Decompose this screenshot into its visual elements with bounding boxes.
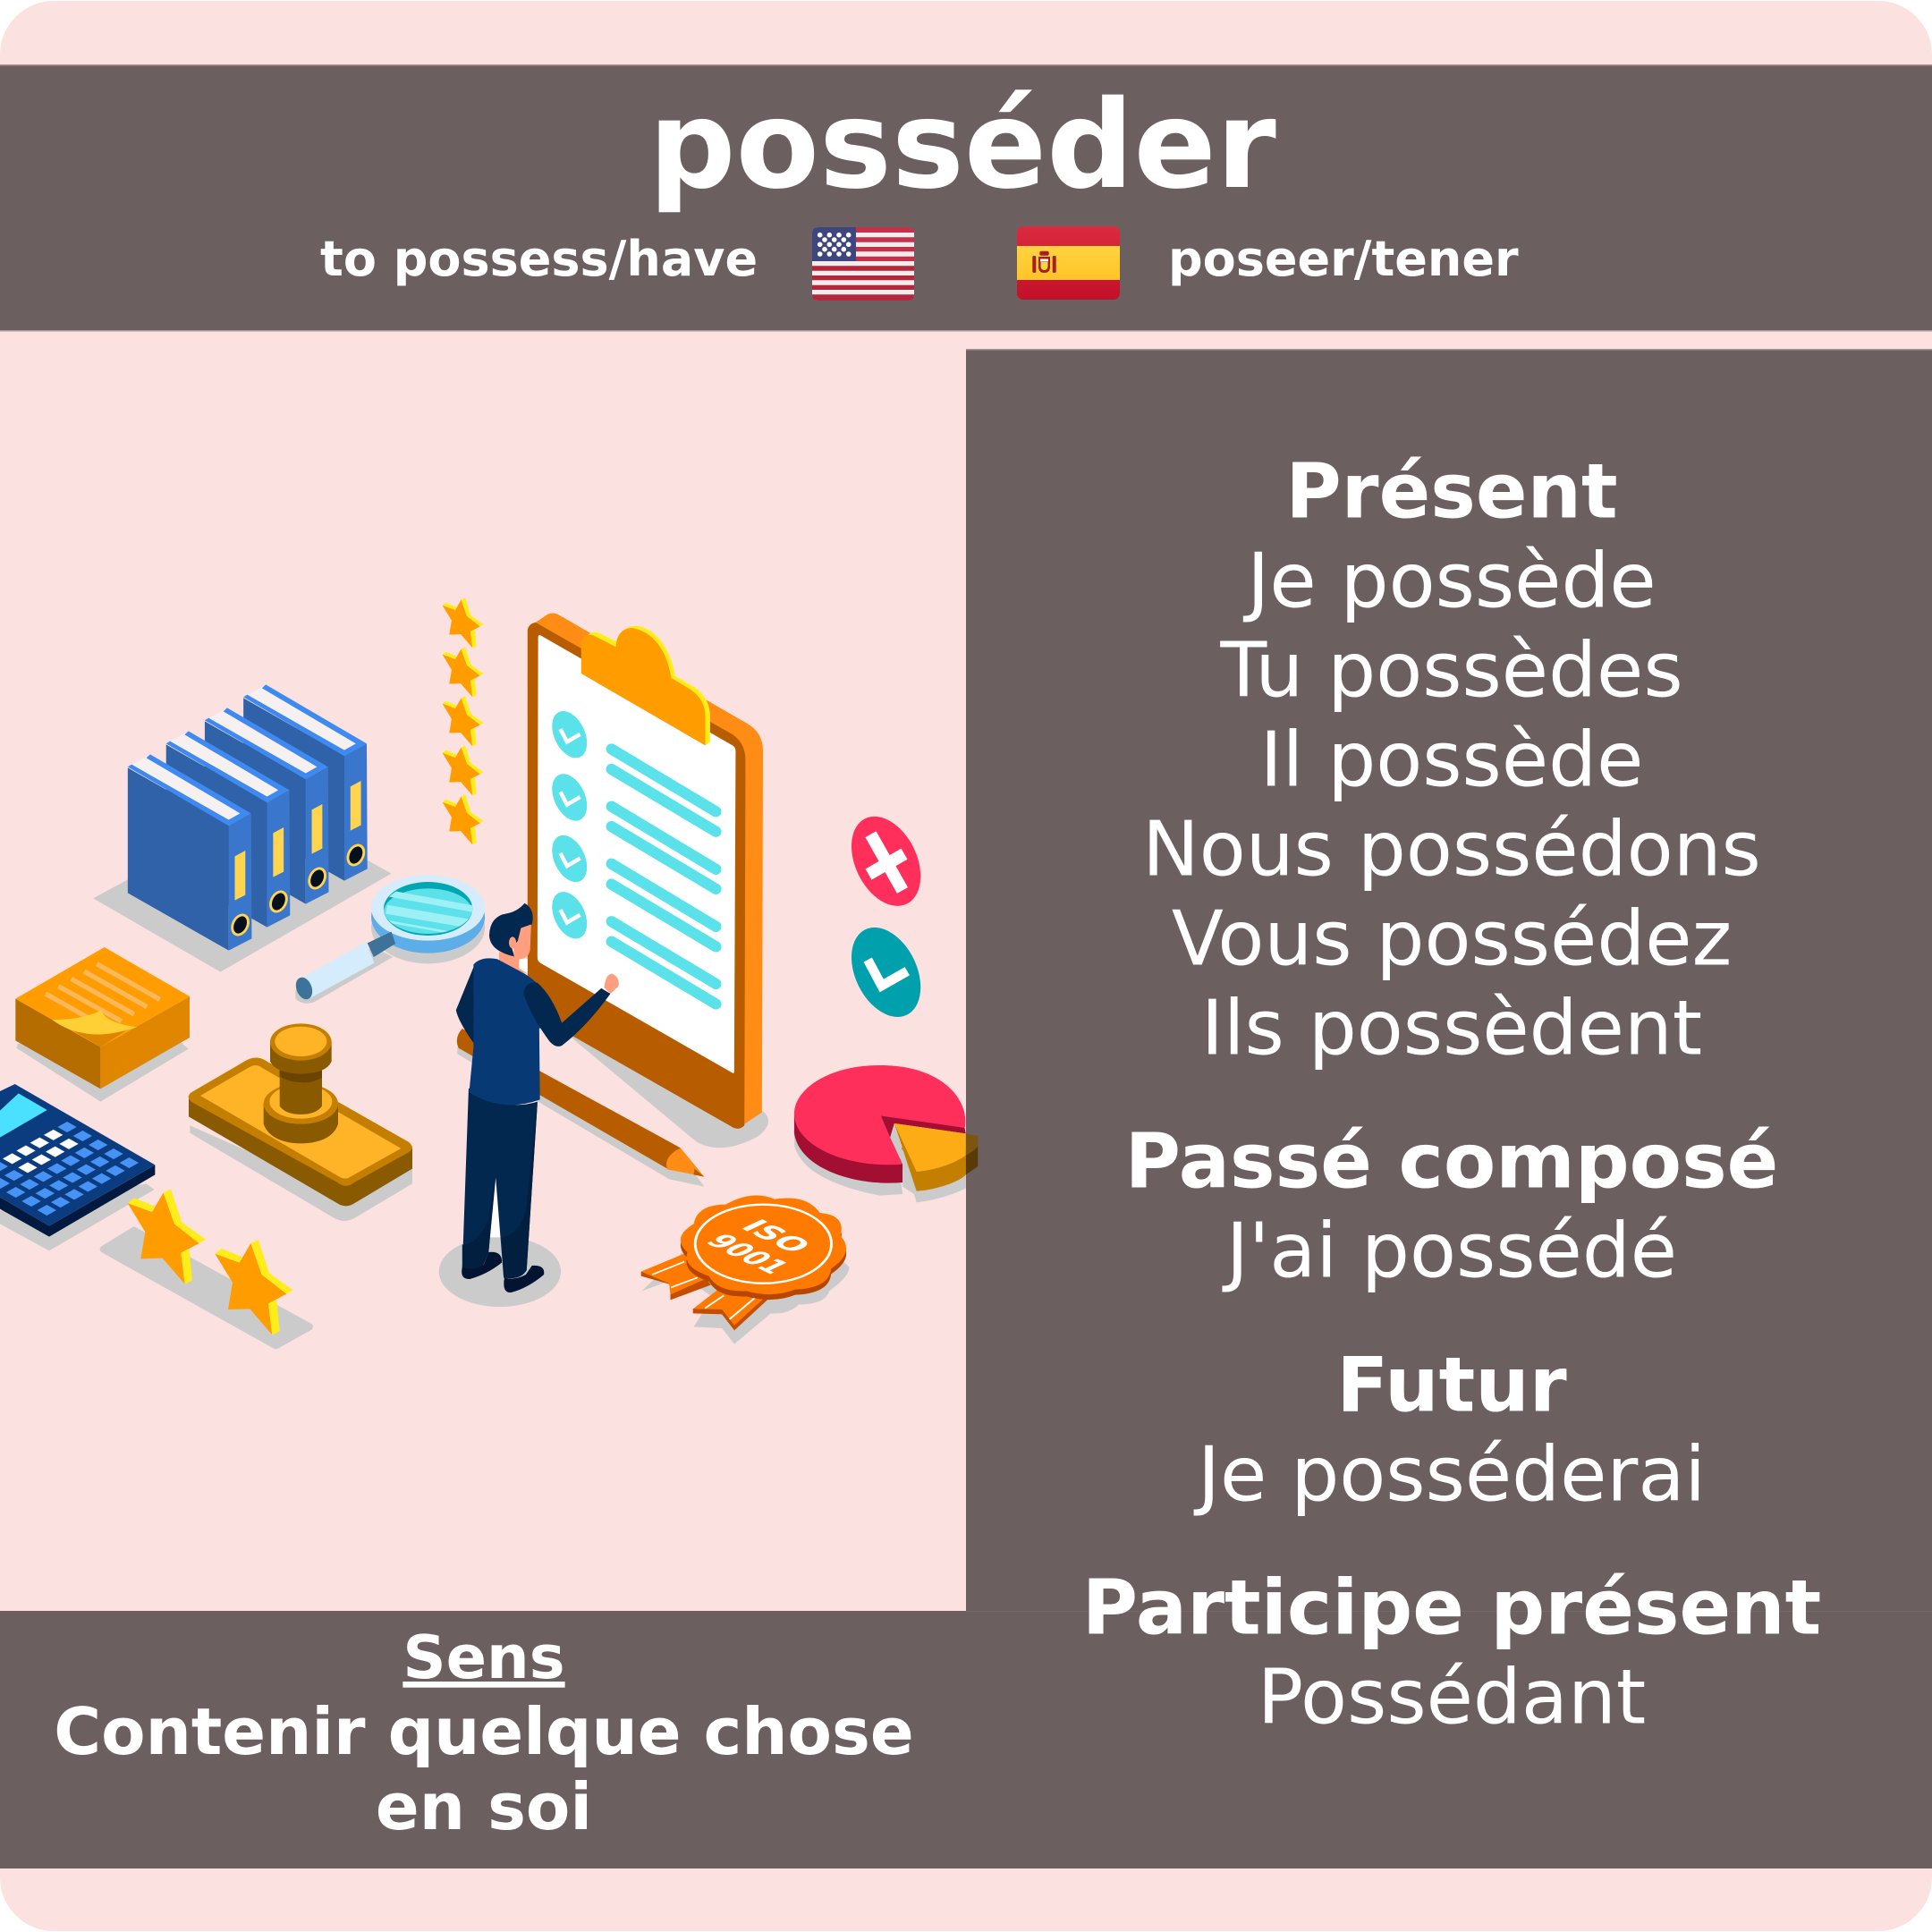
conjugation: futur: Futur: [1336, 1342, 1567, 1429]
conjugation: passé composé: [1125, 1118, 1778, 1295]
conjugation: passé composé: J'ai possédé: [1222, 1208, 1677, 1295]
meaning panel: [0, 1611, 966, 1868]
conjugation: présent: Nous possédons: [1142, 805, 1761, 894]
illustration: magnifying glass: [293, 875, 485, 1004]
conjugation: présent: Tu possèdes: [1219, 626, 1683, 716]
badge text: [698, 1216, 818, 1278]
conjugation: présent: Présent: [1285, 447, 1618, 537]
conjugation: futur: [1193, 1342, 1706, 1519]
meaning text: en soi: [376, 1769, 592, 1844]
conjugation: participe présent: Participe présent: [1082, 1563, 1821, 1653]
icon: teal check badge: [838, 916, 935, 1029]
illustration: binders: [93, 684, 391, 972]
english translation: to possess/have: [320, 231, 758, 287]
panel: conjugations: [966, 349, 1932, 1868]
illustration: ISO 9001 badge: [641, 1196, 849, 1344]
conjugation: présent: Vous possédez: [1172, 894, 1732, 984]
illustration: pie chart: [794, 1065, 978, 1202]
meaning text: [54, 1694, 914, 1844]
icon: Spain flag: [1017, 226, 1120, 300]
illustration: note pad: [15, 947, 190, 1102]
conjugation: présent: Ils possèdent: [1201, 984, 1702, 1073]
conjugation: présent: Il possède: [1260, 716, 1643, 805]
illustration: rating stars column: [443, 597, 484, 844]
meaning text: Contenir quelque chose: [54, 1694, 914, 1769]
icon: US flag: [812, 227, 914, 301]
illustration: clipboard: [528, 613, 768, 1148]
header band: [0, 64, 1932, 331]
checklist: [545, 706, 716, 1004]
illustration: pencil: [457, 1029, 704, 1187]
illustration: calculator: [0, 1084, 155, 1250]
conjugation: passé composé: Passé composé: [1125, 1118, 1778, 1206]
badge text: ISO: [733, 1216, 818, 1258]
meaning heading: Sens: [402, 1623, 565, 1692]
title: posséder: [648, 75, 1276, 216]
conjugation: participe présent: [1082, 1563, 1821, 1742]
conjugation: participe présent: Possédant: [1258, 1653, 1646, 1742]
icon: red cross badge: [838, 805, 935, 918]
clipboard clip: [581, 626, 710, 745]
illustration: stamp: [189, 1023, 412, 1221]
spanish translation: poseer/tener: [1168, 231, 1519, 287]
conjugation: présent: [1142, 447, 1761, 1073]
badge text: 9001: [698, 1230, 798, 1278]
illustration: man: [439, 903, 619, 1307]
conjugation: présent: Je possède: [1242, 537, 1657, 626]
conjugation: futur: Je posséderai: [1193, 1431, 1706, 1519]
illustration: large stars: [104, 1189, 309, 1345]
